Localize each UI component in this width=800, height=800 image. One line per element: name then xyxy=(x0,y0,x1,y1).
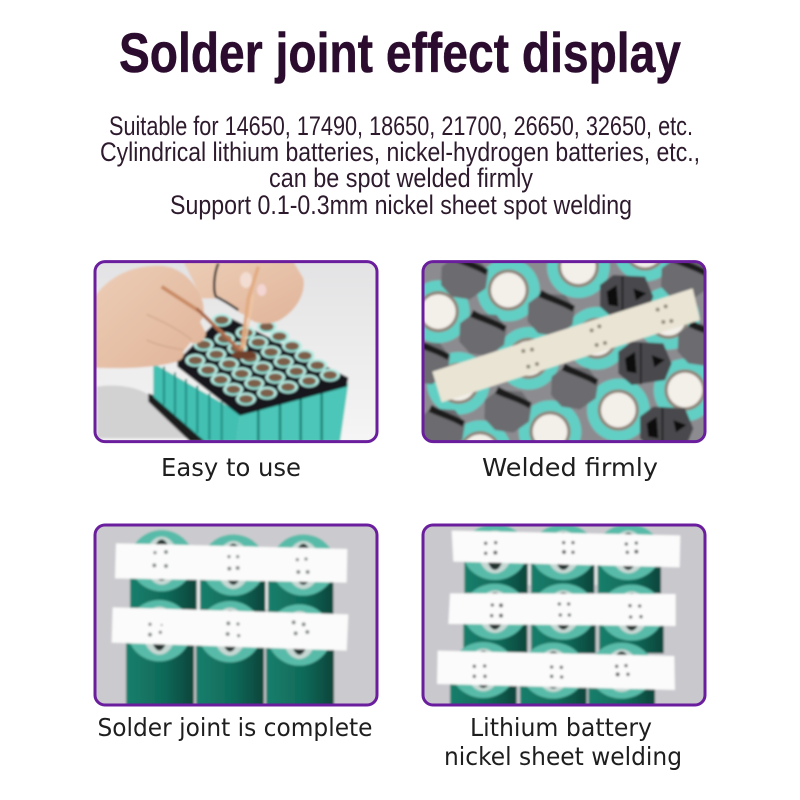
text block: description: can be spot welded firmly xyxy=(269,163,533,193)
title: Solder joint effect display xyxy=(119,21,681,84)
text block: description: Support 0.1-0.3mm nickel sheet spot welding xyxy=(170,190,632,220)
panel: solder joint photo xyxy=(90,520,385,715)
caption: easy to use: Easy to use xyxy=(161,453,301,482)
nickel strip xyxy=(432,288,700,402)
panel: welded firmly photo xyxy=(422,260,706,444)
panel: nickel sheet welding photo xyxy=(415,520,710,715)
caption: lithium battery nickel sheet welding xyxy=(444,713,682,771)
caption: solder joint is complete: Solder joint is complete xyxy=(98,713,372,742)
caption: lithium battery nickel sheet welding: Lithium battery xyxy=(470,713,652,742)
nickel strips xyxy=(112,543,348,651)
text block: description xyxy=(100,111,700,220)
caption: lithium battery nickel sheet welding: nickel sheet welding xyxy=(444,742,682,771)
caption: welded firmly: Welded firmly xyxy=(482,453,658,482)
nickel strips xyxy=(437,531,680,690)
panel: easy to use photo xyxy=(90,255,385,450)
text block: description: Cylindrical lithium batteries, nickel-hydrogen batteries, etc., xyxy=(100,137,700,167)
